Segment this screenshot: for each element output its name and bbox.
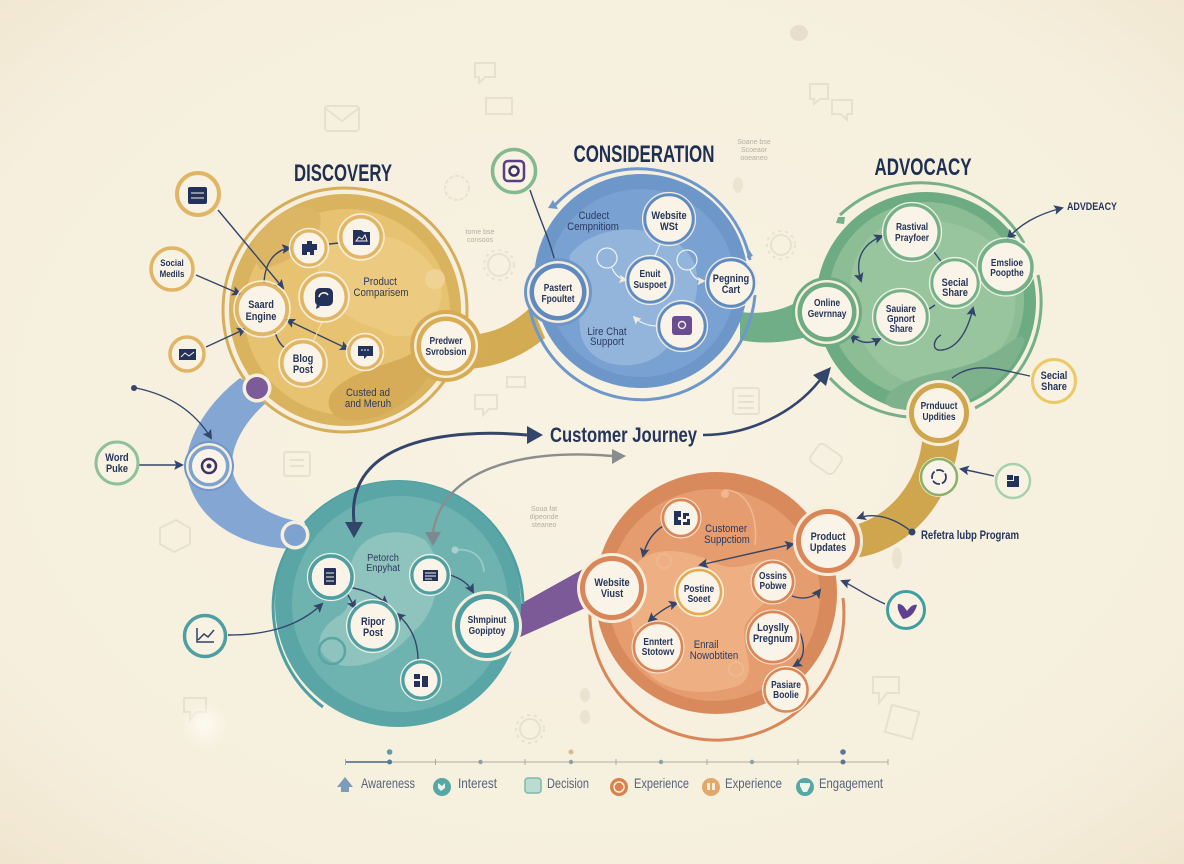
- legend: awareness: Awareness: [361, 775, 415, 791]
- node: loyalty program: Loyslly: [757, 622, 789, 634]
- node: email support: Suspoet: [633, 279, 667, 290]
- node: icon puzzle orange: [661, 498, 701, 538]
- label: research enquiry: Enpyhat: [366, 563, 400, 574]
- node: social share: Secial: [942, 277, 969, 289]
- node: enntert stotowv: Enntert: [643, 636, 673, 647]
- node: ripor post: Post: [363, 627, 384, 639]
- node: product updates orange: Product: [811, 531, 846, 543]
- node: product updates orange: Updates: [810, 542, 847, 554]
- node: postine soeet: Postine: [684, 583, 714, 594]
- panel: discovery: [151, 160, 482, 432]
- arrows inside discovery: [196, 210, 348, 349]
- legend: engagement: [796, 775, 883, 796]
- arrows inside teal: [228, 575, 473, 660]
- node: word puke: Word: [105, 452, 129, 464]
- node: pasiare boolie: [762, 666, 810, 714]
- node: enntert stotowv: [632, 621, 684, 673]
- node: gear icon: [919, 457, 959, 497]
- node: rastival prayfoer: [882, 202, 942, 262]
- node: puzzle callout: [961, 464, 1030, 498]
- node: social share callout: [1032, 360, 1076, 402]
- node: email support: Enuit: [640, 268, 660, 279]
- node: ripor post: Ripor: [361, 616, 385, 628]
- node: twitter bird: [842, 581, 924, 628]
- node: icon inbox: [338, 214, 384, 260]
- label: custed ad and meruh: and Meruh: [345, 399, 391, 410]
- label: email newsletter: Nowobtiten: [690, 651, 738, 662]
- legend: experience two: [702, 775, 782, 796]
- node: pastert fpoultet: Fpoultet: [541, 293, 575, 304]
- panel: engagement teal: [184, 481, 523, 727]
- panel: consideration: [492, 141, 756, 400]
- node: online gateway: Online: [814, 297, 840, 308]
- advocacy disc: [816, 183, 1041, 417]
- node: online gateway: Gevrnnay: [808, 308, 847, 319]
- legend: [337, 775, 883, 796]
- node: product submission: [410, 310, 482, 382]
- node: social media: [151, 248, 193, 290]
- node: icon calendar: [177, 173, 219, 215]
- band: engagement to experience (purple): [515, 568, 592, 638]
- arrows inside orange: [643, 526, 820, 666]
- node: emslioe poopthe: Emslioe: [991, 257, 1023, 268]
- faint background icons: Soua fat: [531, 506, 557, 513]
- node: postine soeet: [674, 567, 724, 617]
- node: shopping cart: Pegning: [713, 273, 749, 285]
- band: discovery to awareness path (blue): [186, 378, 297, 549]
- node: blue marker: [280, 520, 310, 550]
- node: blog post: [279, 339, 327, 387]
- node: rastival prayfoer: Rastival: [896, 221, 928, 232]
- node: word puke: Puke: [106, 463, 128, 475]
- node: ossins pobwe: Pobwe: [759, 580, 787, 591]
- node: security icon: [656, 300, 708, 352]
- title: customer journey with arrows: [345, 367, 831, 546]
- node: word puke: [96, 442, 182, 484]
- legend: engagement: Engagement: [819, 775, 883, 791]
- node: pasiare boolie: Pasiare: [771, 679, 801, 690]
- faint background icons: Soane bse: [737, 139, 771, 146]
- timeline: [346, 749, 888, 765]
- label: conduct comparison: Cempnitiom: [567, 222, 619, 233]
- legend: experience one: [610, 775, 689, 796]
- node: emslioe poopthe: [977, 238, 1035, 296]
- node: ripor post: [346, 600, 400, 652]
- node: social share callout: Secial: [1041, 370, 1068, 382]
- node: website visit: Website: [651, 210, 687, 222]
- title: customer journey with arrows: Customer Journey: [550, 424, 697, 447]
- node: trend chart: [184, 616, 226, 656]
- label: customer support: Suppctiom: [704, 535, 750, 546]
- node: shopping cart: Cart: [722, 284, 741, 296]
- legend: decision: [525, 775, 589, 793]
- label: research enquiry: Petorch: [367, 553, 399, 564]
- legend: experience one: Experience: [634, 775, 689, 791]
- arrow: into target node: [131, 385, 211, 438]
- node: search engine: Saard: [248, 299, 274, 311]
- panel: advocacy: [792, 154, 1118, 446]
- node: blog post: Post: [293, 364, 314, 376]
- node: product submission: Svrobsion: [426, 346, 467, 357]
- node: shopping gateway: Gopiptoy: [469, 625, 506, 636]
- node: shopping gateway: Shmpinut: [468, 614, 506, 625]
- label: conduct comparison: Cudect: [579, 211, 609, 222]
- faint background icons: Scoeaor: [741, 147, 768, 154]
- label: email newsletter: Enrail: [694, 640, 718, 651]
- node: product updates gold: [906, 380, 972, 446]
- node: website visit: [642, 192, 696, 246]
- legend: experience two: Experience: [725, 775, 782, 791]
- node: search engine: [234, 281, 290, 337]
- node: pastert fpoultet: Pastert: [544, 282, 572, 293]
- label: live chat support: Lire Chat: [587, 327, 627, 338]
- node: icon chat refresh: [299, 272, 349, 322]
- legend: interest: Interest: [458, 775, 497, 791]
- node: rastival prayfoer: Prayfoer: [895, 232, 929, 243]
- node: email support: [626, 256, 674, 304]
- node: loyalty program: [746, 610, 800, 664]
- node: website visit orange: [577, 553, 647, 623]
- node: pasiare boolie: Boolie: [773, 689, 799, 700]
- heading: advocacy: ADVOCACY: [874, 154, 972, 181]
- band: advocacy to experience (gold): [855, 420, 960, 558]
- node: icon document: [308, 554, 354, 600]
- node: square support share: Gpnort: [887, 313, 915, 324]
- node: search engine: Engine: [246, 311, 277, 323]
- label: custed ad and meruh: Custed ad: [346, 388, 390, 399]
- node: online gateway: [792, 277, 862, 347]
- node: social media: Social: [160, 257, 184, 268]
- node: emslioe poopthe: Poopthe: [990, 267, 1024, 278]
- node: icon chart: [170, 337, 204, 371]
- node: target icon: [184, 441, 234, 491]
- node: loyalty program: Pregnum: [753, 633, 793, 645]
- node: icon notes: [410, 554, 450, 596]
- node: square support share: [872, 288, 930, 346]
- legend: interest: [433, 775, 497, 796]
- node: product submission: Predwer: [429, 335, 463, 346]
- node: ossins pobwe: [751, 560, 795, 604]
- node: icon message: [346, 334, 384, 370]
- node: social share: [930, 258, 980, 308]
- node: product updates gold: Updities: [922, 411, 956, 422]
- label: referral loop program: [858, 516, 1019, 542]
- node: blog post: Blog: [293, 353, 313, 365]
- faint background icons: dipeonde: [530, 514, 559, 521]
- discovery disc: [223, 188, 467, 432]
- faint background icons: consoos: [467, 237, 494, 244]
- label: referral loop program: Refetra lubp Program: [921, 528, 1019, 542]
- node: icon puzzle: [290, 228, 328, 268]
- node: ossins pobwe: Ossins: [759, 570, 787, 581]
- band: consideration to advocacy (green): [740, 298, 814, 342]
- heading: discovery: DISCOVERY: [294, 160, 392, 187]
- node: website visit orange: Website: [594, 577, 630, 589]
- band: discovery to consideration (gold): [465, 306, 545, 369]
- node: shopping gateway: [452, 591, 522, 661]
- node: product updates gold: Prnduuct: [921, 400, 957, 411]
- label: customer support: Customer: [705, 524, 748, 535]
- faint background icons: steaneo: [532, 522, 557, 529]
- node: pastert fpoultet: [524, 258, 592, 326]
- node: social media: Medils: [160, 268, 185, 279]
- node: instagram icon: [492, 150, 536, 192]
- consideration disc: [530, 169, 755, 400]
- label: product comparison: Comparisem: [354, 288, 408, 299]
- orange disc: [590, 472, 844, 740]
- panel: experience orange: [577, 472, 863, 740]
- node: icon blocks: [400, 660, 442, 700]
- arrows inside advocacy: [851, 208, 1062, 378]
- node: social share callout: Share: [1041, 381, 1067, 393]
- faint background icons: ooeaneo: [740, 155, 768, 162]
- node: square support share: Share: [889, 323, 913, 334]
- node: social share: Share: [942, 287, 968, 299]
- node: postine soeet: Soeet: [688, 593, 710, 604]
- legend: awareness: [337, 775, 415, 792]
- legend: decision: Decision: [547, 775, 589, 791]
- faint background icons: [160, 25, 919, 749]
- node: square support share: Sauiare: [886, 303, 916, 314]
- label: product comparison: Product: [363, 277, 397, 288]
- node: website visit orange: Viust: [601, 588, 624, 600]
- node: product updates orange: [793, 506, 863, 576]
- teal disc: [273, 481, 523, 727]
- node: website visit: WSt: [660, 221, 679, 233]
- node: shopping cart: [706, 258, 756, 308]
- node: purple marker: [242, 374, 272, 402]
- decorative connector circles and arrows: [530, 190, 704, 326]
- label: advocacy callout: ADVDEACY: [1067, 201, 1118, 213]
- heading: consideration: CONSIDERATION: [574, 141, 714, 168]
- node: enntert stotowv: Stotowv: [642, 646, 675, 657]
- label: live chat support: Support: [590, 337, 624, 348]
- faint background icons: tome bse: [466, 229, 495, 236]
